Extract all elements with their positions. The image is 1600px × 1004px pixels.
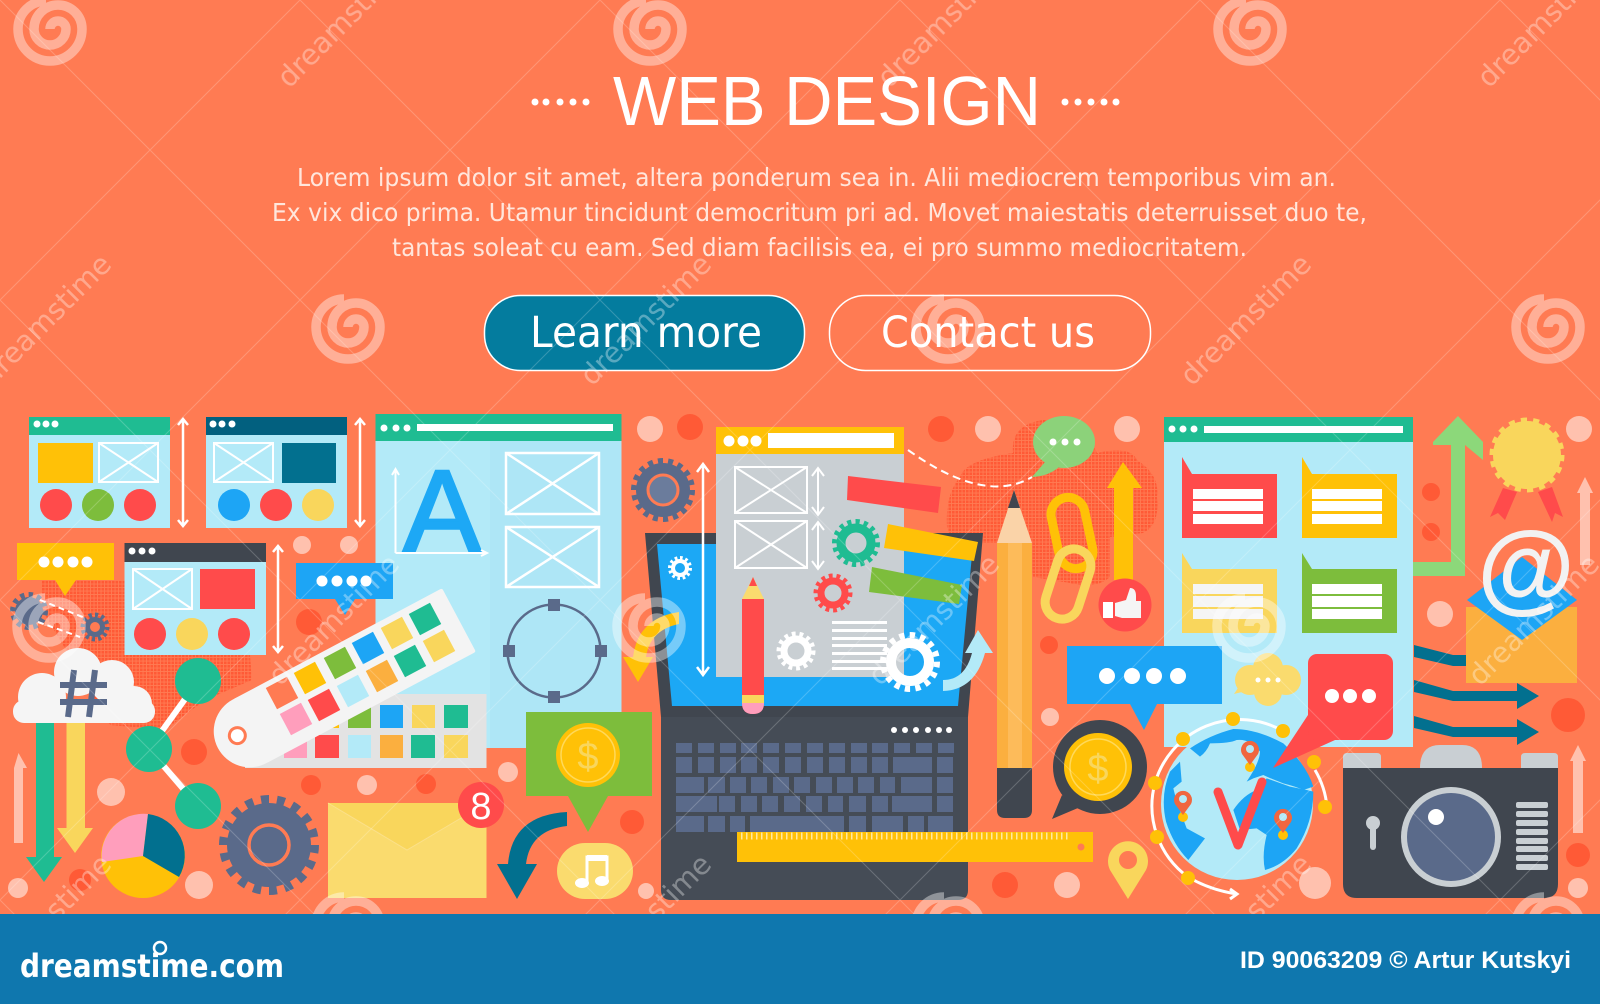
- orbit ring: [1152, 720, 1327, 899]
- card: green: [1302, 553, 1397, 633]
- arrow: window 3 height: [273, 546, 283, 652]
- arrow: green elbow up: [1413, 416, 1483, 576]
- laptop base: [661, 717, 968, 900]
- gear: white large: [883, 635, 937, 689]
- button: contact us: Contact us: [881, 308, 1095, 358]
- rotated swatch strip: [201, 588, 476, 780]
- laptop screen bezel: [645, 533, 983, 717]
- body paragraph: Ex vix dico prima. Utamur tincidunt democritum pri ad. Movet maiestatis deterruisset duo te,: [272, 198, 1367, 227]
- gears on document: [670, 522, 937, 689]
- panel: page layout document: [716, 427, 904, 677]
- letter A: A: [403, 446, 482, 578]
- watermark text: dreamstime: [862, 548, 1006, 692]
- icon: email envelope: [1466, 511, 1577, 683]
- indicator dots: [891, 727, 952, 733]
- arrow: blue curved: [497, 812, 567, 899]
- left dots: [532, 98, 590, 106]
- sticky notes: [847, 476, 978, 604]
- colour swatches: [201, 588, 487, 780]
- icon: gear upper: [635, 462, 691, 518]
- icon: music note: [557, 843, 633, 899]
- button: learn more: [484, 296, 804, 370]
- title: [532, 62, 1120, 140]
- watermark text: dreamstime: [574, 248, 718, 392]
- panel: message board: [1164, 417, 1413, 747]
- notification badge: [458, 782, 504, 828]
- halftone backdrop right: [947, 420, 1157, 585]
- speech bubble: blue: [296, 563, 393, 615]
- body paragraph: tantas soleat cu eam. Sed diam facilisis ea, ei pro summo mediocritatem.: [392, 233, 1247, 262]
- arrow: light blue curved: [943, 630, 993, 691]
- small gears: [13, 595, 107, 639]
- icon: camera: [1343, 745, 1558, 898]
- grey swatch card: [245, 694, 486, 768]
- icon: yellow envelope: [328, 803, 486, 898]
- arrow: pale up: [14, 753, 27, 843]
- body paragraph: Lorem ipsum dolor sit amet, altera ponderum sea in. Alii mediocrem temporibus vim an.: [297, 163, 1336, 192]
- footer credit: ID 90063209 © Artur Kutskyi: [1240, 947, 1571, 974]
- network nodes: [126, 658, 221, 829]
- arrow: document height: [697, 464, 709, 675]
- icon: globe: [1148, 712, 1332, 899]
- icon: chain link: [1041, 494, 1096, 623]
- speech bubble: green: [1032, 416, 1095, 477]
- icon: thumbs up: [1098, 578, 1152, 632]
- speech bubble: red: [1273, 654, 1393, 768]
- panel: wireframe window 3: [124, 543, 266, 655]
- vector circle: [503, 599, 607, 703]
- watermark text: dreamstime: [1174, 848, 1318, 992]
- icon: coin speech bubble: $: [1087, 748, 1109, 790]
- ruler: [737, 832, 1093, 862]
- body paragraph: [272, 163, 1367, 262]
- icon: large gear: [225, 801, 313, 889]
- footer logo: dreamstime.com: [20, 947, 284, 985]
- icon: coin speech bubble: [1052, 720, 1147, 819]
- panel: wireframe window 2: [206, 417, 347, 528]
- arrow: yellow up: [1107, 462, 1142, 580]
- icon: red pencil: [742, 577, 764, 714]
- speech bubble: green coin: $: [577, 736, 599, 778]
- icon: hashtag cloud: [13, 648, 155, 723]
- arrow: green down: [26, 723, 62, 882]
- arrow: window 1 height: [178, 419, 188, 526]
- check mark: [1218, 782, 1262, 845]
- watermark text: dreamstime: [262, 548, 406, 692]
- gear: teal: [835, 522, 877, 564]
- panel: typography layout: [376, 414, 622, 748]
- heading text: WEB DESIGN: [613, 62, 1041, 140]
- dashed connector: [908, 450, 1032, 486]
- laptop: [645, 533, 983, 900]
- pie chart: [101, 814, 185, 898]
- notification badge: 8: [470, 786, 492, 828]
- halftone backdrop left: [42, 580, 252, 730]
- speech bubble: green coin: [526, 712, 652, 832]
- arrow: yellow down: [57, 723, 93, 853]
- gear: white: [779, 634, 813, 668]
- location pins: [1174, 741, 1292, 840]
- button: contact us: [830, 296, 1150, 370]
- teal arrows: [1414, 645, 1539, 745]
- arrow: yellow curved: [623, 612, 679, 682]
- axis arrows: [392, 469, 487, 556]
- card: yellow: [1302, 457, 1397, 538]
- card: red: [1182, 457, 1277, 538]
- icon: location pin: [1108, 841, 1148, 899]
- card: pale yellow: [1182, 553, 1277, 633]
- gear: red: [816, 576, 850, 610]
- icon: rosette badge: [1490, 420, 1563, 522]
- arrow: window 2 height: [355, 419, 365, 526]
- watermark text: dreamstime: [574, 848, 718, 992]
- speech bubble: yellow: [17, 543, 114, 596]
- keyboard: [676, 743, 954, 832]
- watermark text: dreamstime: [1174, 248, 1318, 392]
- decorative circles: [8, 414, 1592, 899]
- right dots: [1062, 98, 1120, 106]
- pale arrows right: [1570, 477, 1593, 833]
- icon: email envelope: @: [1477, 511, 1575, 623]
- laptop screen: [657, 544, 973, 706]
- footer bar: [0, 914, 1600, 1004]
- speech bubble: small yellow cloud: [1234, 653, 1301, 706]
- speech bubble: big blue: [1067, 646, 1222, 730]
- icon: big pencil: [997, 490, 1032, 818]
- gear: white small: [670, 558, 690, 578]
- button: learn more: Learn more: [530, 308, 762, 358]
- continents: [1164, 729, 1313, 870]
- panel: wireframe window 1: [29, 417, 170, 528]
